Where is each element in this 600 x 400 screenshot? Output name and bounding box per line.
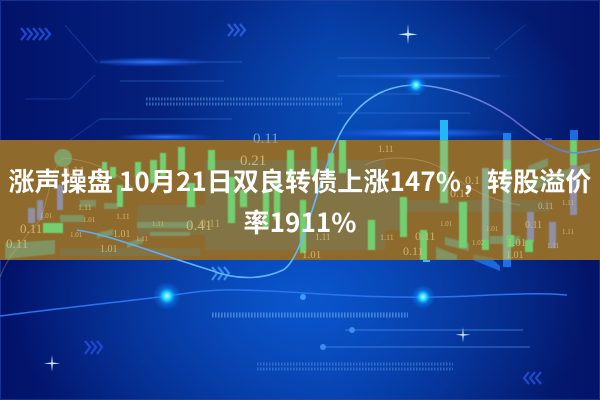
glowing nodes xyxy=(54,74,435,350)
title: 率1911% xyxy=(244,203,356,240)
faint numeric labels: 1.01 xyxy=(70,231,83,239)
faint numeric labels: 0.11 xyxy=(525,220,542,231)
faint numeric labels: 1.11 xyxy=(116,212,130,221)
faint numeric labels: 0.11 xyxy=(415,229,436,243)
title xyxy=(9,162,591,240)
faint numeric labels: 0.11 xyxy=(20,221,42,236)
faint numeric labels: 1.11 xyxy=(378,144,393,154)
title: 涨声操盘 10月21日双良转债上涨147%，转股溢价 xyxy=(9,162,591,199)
faint numeric labels: 0.41 xyxy=(186,218,212,234)
faint numeric labels: 1.01 xyxy=(440,220,453,228)
grey bars xyxy=(440,140,511,260)
faint numeric labels: 0.21 xyxy=(240,153,266,169)
faint numeric labels: 0.1 xyxy=(465,173,480,187)
chart curves xyxy=(0,85,600,316)
faint numeric labels: 0.11 xyxy=(6,236,28,251)
faint numeric labels: 0.11 xyxy=(403,244,424,258)
purple bars xyxy=(28,165,577,248)
faint numeric labels: 1.11 xyxy=(78,203,92,212)
faint numeric labels: 0.11 xyxy=(63,163,85,178)
faint numeric labels: 1.01 xyxy=(486,225,499,233)
faint numeric labels: 0.11 xyxy=(253,131,279,147)
translucent gold title band xyxy=(0,140,600,260)
grey-green flat bars xyxy=(5,158,590,260)
faint numeric labels: 1.11 xyxy=(547,242,559,250)
blue bars rising above and below the band xyxy=(423,120,578,271)
binary digit strips xyxy=(146,99,453,369)
chevron arrows xyxy=(21,24,541,384)
faint numeric labels: 0.11 xyxy=(200,216,221,230)
faint numeric labels: 0.11 xyxy=(450,186,471,200)
faint numeric labels: 1.11 xyxy=(380,233,394,242)
faint numeric labels: 1.02 xyxy=(472,239,485,247)
faint numeric labels: 1.01 xyxy=(83,216,96,224)
faint numeric labels: 1.11 xyxy=(562,199,574,207)
candlestick bars seen through the band xyxy=(5,140,590,260)
faint numeric labels: 1.01 xyxy=(302,249,321,261)
sparkle stars xyxy=(44,24,471,372)
faint numeric labels: 1.01 xyxy=(100,244,118,255)
bright green bars xyxy=(43,140,577,260)
faint numeric labels: 1.01 xyxy=(507,237,526,249)
faint numeric labels: 1.11 xyxy=(136,235,148,243)
faint numeric labels xyxy=(6,131,574,261)
faint numeric labels: 1.01 xyxy=(113,229,130,240)
faint numeric labels: 1.11 xyxy=(562,228,574,236)
faint numeric labels: 1.11 xyxy=(315,232,330,242)
faint numeric labels: 1.01 xyxy=(40,212,53,220)
faint grey horizontal texture xyxy=(60,160,550,256)
faint numeric labels: 1.01 xyxy=(506,250,524,261)
horizontal light streaks xyxy=(25,25,530,347)
faint numeric labels: 0.11 xyxy=(538,201,553,211)
faint numeric labels: 1.11 xyxy=(152,220,164,228)
